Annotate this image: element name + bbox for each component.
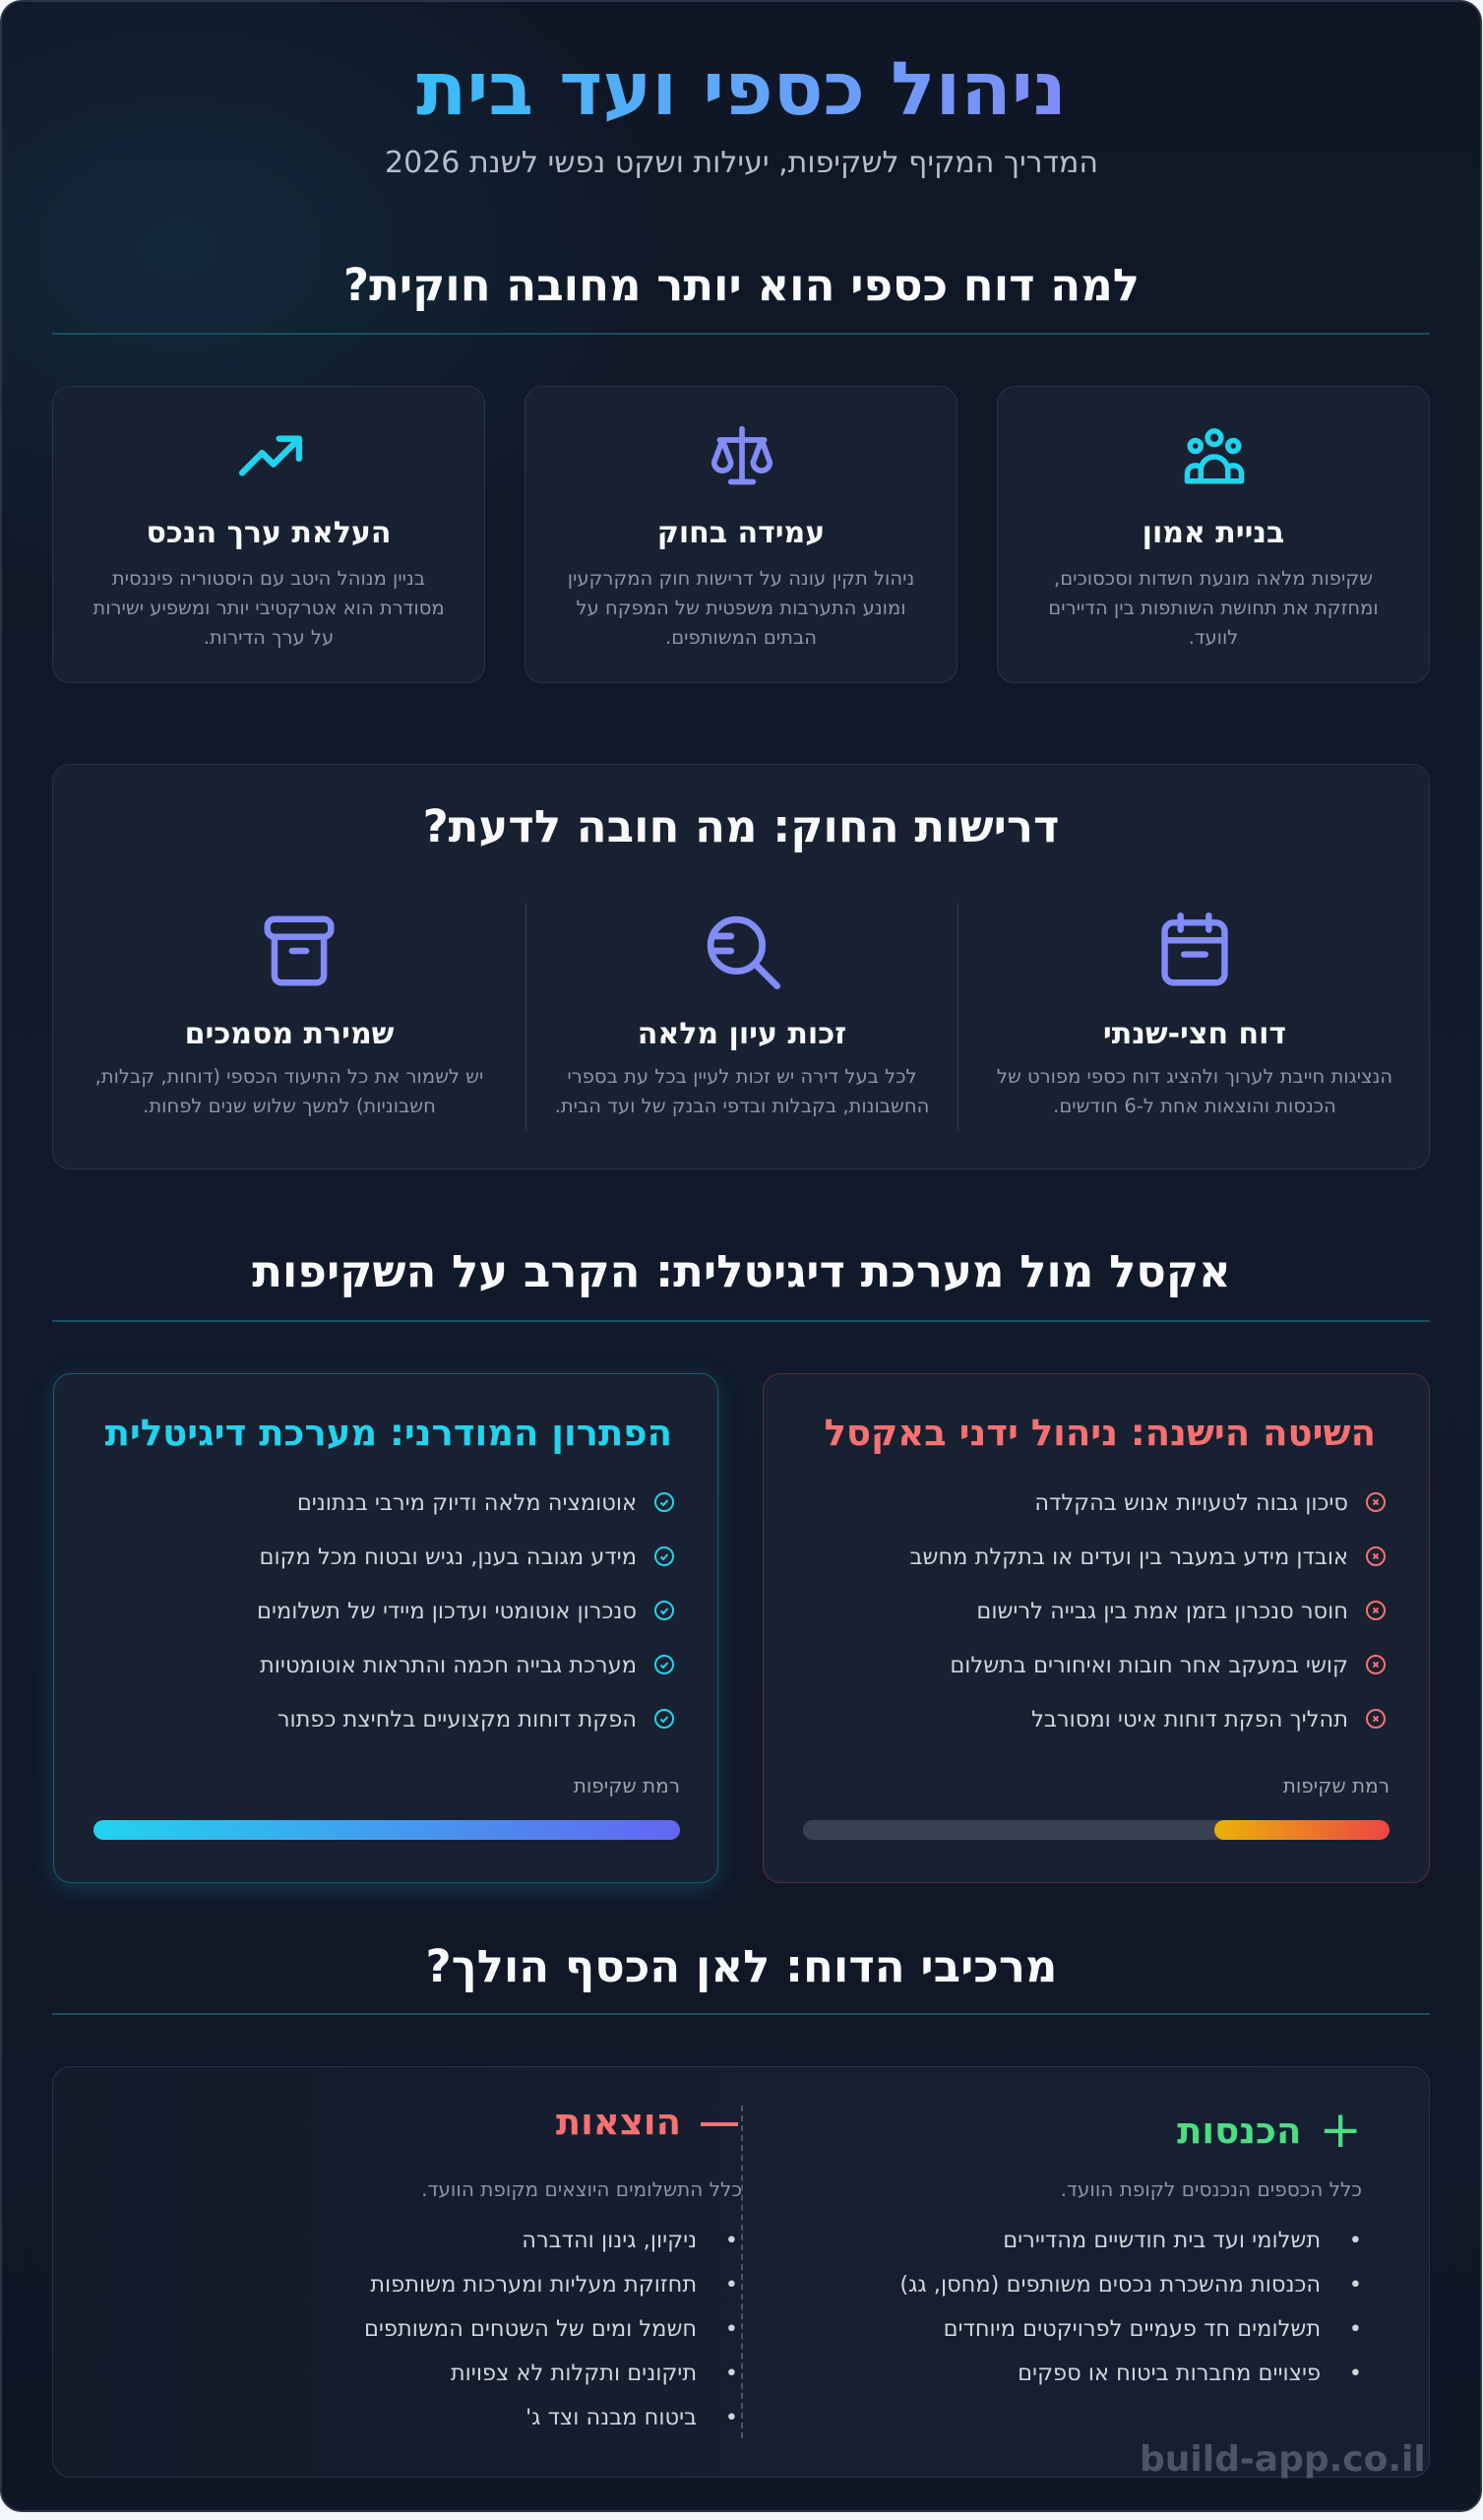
heading: דרישות החוק: מה חובה לדעת? (423, 800, 1059, 852)
bar: transparency high: רמת שקיפות (574, 1774, 680, 1797)
card: value: בניין מנוהל היטב עם היסטוריה פיננסית מסודרת הוא אטרקטיבי יותר ומשפיע ישירות על ערך הדירות. (93, 567, 445, 649)
list: benefits: מידע מגובה בענן, נגיש ובטוח מכל מקום (260, 1544, 637, 1570)
section heading: excel vs digital: אקסל מול מערכת דיגיטלית: הקרב על השקיפות (252, 1245, 1231, 1297)
icon: calendar (1161, 913, 1228, 986)
card: law (525, 386, 958, 683)
subtitle: המדריך המקיף לשקיפות, יעילות ושקט נפשי לשנת 2026 (385, 146, 1098, 180)
panel: modern solution (53, 1373, 718, 1883)
expenses column: • חשמל ומים של השטחים המשותפים (364, 2316, 738, 2342)
list: benefits: הפקת דוחות מקצועיים בלחיצת כפתור (278, 1707, 637, 1732)
income column: • תשלומים חד פעמיים לפרויקטים מיוחדים (944, 2316, 1362, 2342)
icon: search (707, 915, 780, 989)
col: half-year report: הנציגות חייבת לערוך ולהציג דוח כספי מפורט של הכנסות והוצאות אחת ל-6 חודשים. (997, 1065, 1392, 1117)
card: law: ניהול תקין עונה על דרישות חוק המקרקעין ומונע התערבות משפטית של המפקח על הבתים המשותפים. (568, 567, 914, 649)
icon: trend (238, 435, 303, 476)
panel: legal requirements (52, 764, 1430, 1169)
panel: income & expenses (52, 2066, 1430, 2478)
expenses column (364, 2101, 742, 2430)
income column: • תשלומי ועד בית חודשיים מהדיירים (1003, 2228, 1362, 2253)
expenses column: כלל התשלומים היוצאים מקופת הוועד. (421, 2177, 742, 2201)
expenses column: • ניקיון, גינון והדברה (522, 2228, 738, 2253)
col: half-year report: דוח חצי-שנתי (1103, 1017, 1286, 1051)
expenses column: הוצאות (556, 2101, 681, 2143)
title: ניהול כספי ועד בית (416, 45, 1067, 132)
list: benefits: אוטומציה מלאה ודיוק מירבי בנתונים (297, 1490, 637, 1516)
expenses column: • תיקונים ותקלות לא צפויות (451, 2361, 738, 2386)
list: problems: סיכון גבוה לטעויות אנוש בהקלדה (1034, 1490, 1348, 1516)
watermark: build-app.co.il (1140, 2439, 1426, 2480)
card: trust: בניית אמון (1143, 516, 1284, 550)
list: problems: חוסר סנכרון בזמן אמת בין גבייה לרישום (976, 1599, 1348, 1624)
card: value: העלאת ערך הנכס (147, 516, 391, 550)
list: benefits: מערכת גבייה חכמה והתראות אוטומטיות (260, 1653, 637, 1678)
bar: transparency low (803, 1774, 1390, 1840)
list: benefits (257, 1490, 674, 1732)
bar: transparency high (93, 1774, 680, 1840)
expenses column: • תחזוקת מעליות ומערכות משותפות (370, 2272, 738, 2298)
expenses column: • ביטוח מבנה וצד ג' (525, 2405, 738, 2430)
col: inspection (555, 915, 929, 1117)
icon: people (1185, 428, 1244, 484)
income column: כלל הכספים הנכנסים לקופת הוועד. (1061, 2177, 1362, 2201)
income column (899, 2101, 1362, 2386)
card: value (52, 386, 485, 683)
col: documents (95, 915, 483, 1117)
col: inspection: זכות עיון מלאה (638, 1017, 846, 1051)
icon: archive (264, 915, 335, 986)
col: half-year report (997, 913, 1392, 1117)
list: problems: תהליך הפקת דוחות איטי ומסורבל (1031, 1707, 1348, 1732)
panel: old method (763, 1373, 1430, 1883)
list: benefits: סנכרון אוטומטי ועדכון מיידי של תשלומים (257, 1599, 637, 1624)
section heading: components: מרכיבי הדוח: לאן הכסף הולך? (426, 1940, 1057, 1992)
icon: scale (711, 425, 773, 484)
panel: old method: השיטה הישנה: ניהול ידני באקסל (824, 1412, 1376, 1454)
section heading: why: למה דוח כספי הוא יותר מחובה חוקית? (343, 259, 1140, 311)
col: inspection: לכל בעל דירה יש זכות לעיין בכל עת בספרי החשבונות, בקבלות ובדפי הבנק של ועד הבית. (555, 1065, 929, 1117)
col: documents: יש לשמור את כל התיעוד הכספי (דוחות, קבלות, חשבוניות) למשך שלוש שנים לפחות. (95, 1065, 483, 1117)
bar: transparency low: רמת שקיפות (1283, 1774, 1390, 1797)
list: problems (909, 1490, 1386, 1732)
card: trust (997, 386, 1430, 683)
list: problems: אובדן מידע במעבר בין ועדים או בתקלת מחשב (909, 1544, 1348, 1570)
income column: • הכנסות מהשכרת נכסים משותפים (מחסן, גג) (899, 2272, 1362, 2298)
card: law: עמידה בחוק (657, 516, 825, 550)
income column: +הכנסות (1177, 2101, 1362, 2160)
card: trust: שקיפות מלאה מונעת חשדות וסכסוכים, ומחזקת את תחושת השותפות בין הדיירים לוועד. (1048, 567, 1379, 649)
panel: modern solution: הפתרון המודרני: מערכת דיגיטלית (105, 1412, 672, 1454)
col: documents: שמירת מסמכים (185, 1017, 394, 1051)
list: problems: קושי במעקב אחר חובות ואיחורים בתשלום (950, 1653, 1348, 1678)
income column: • פיצויים מחברות ביטוח או ספקים (1018, 2361, 1362, 2386)
